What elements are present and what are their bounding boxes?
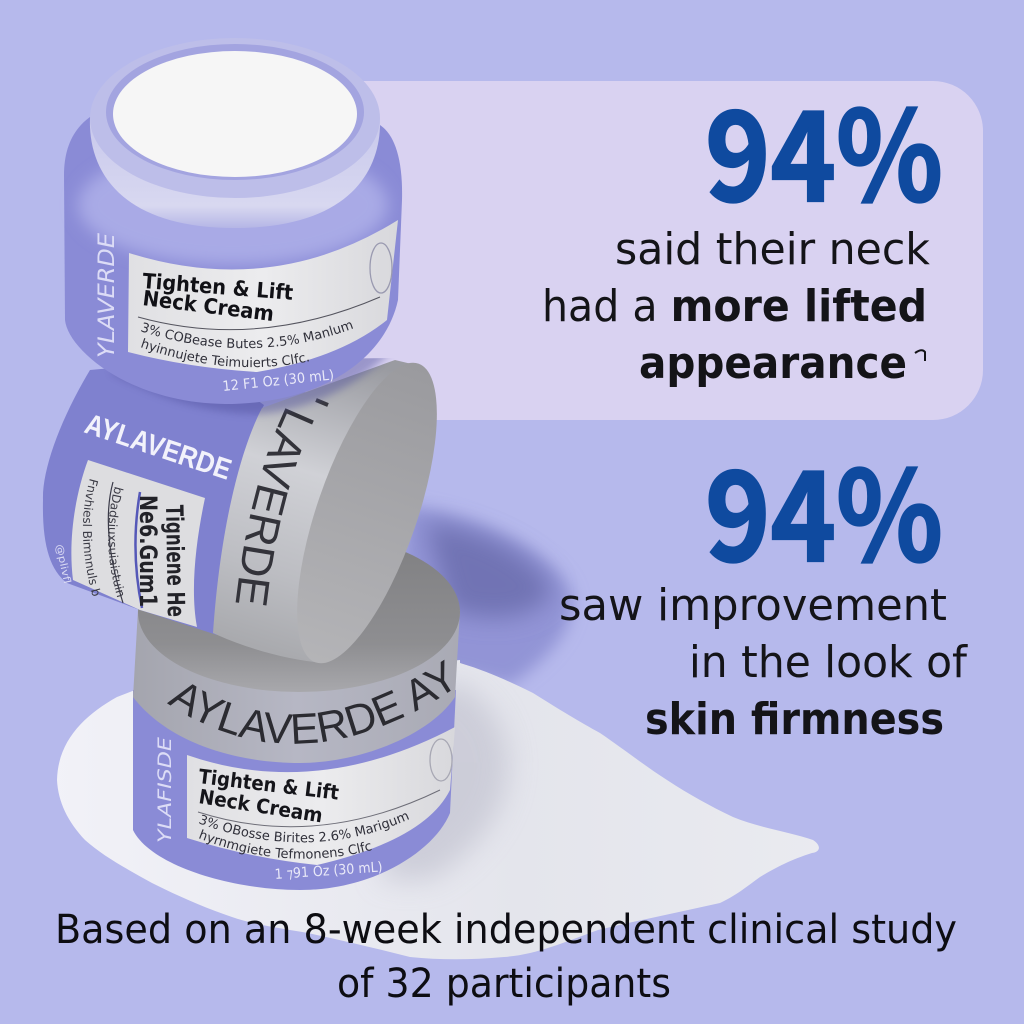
jar middle label: Tigniene He [160,505,190,617]
jar middle body [43,360,264,635]
jar middle label: Ne6.Gum1 [134,495,162,607]
jar bottom side brand: YLAFISDE [154,737,176,843]
jar bottom label: Neck Cream [197,784,324,827]
jar top side brand: YLAVERDE [95,233,120,358]
stat 2: description: skin firmness [645,694,944,745]
jar middle small text: @plivfl [53,543,72,585]
jar middle brand: AYLAVERDE [81,408,235,487]
jar middle lid face [268,347,466,679]
jar middle silver lid band [213,360,420,663]
jar top label: hyinnujete Teimuierts Clfc. [141,338,309,368]
jar top inner ring [106,44,364,180]
jar: top [64,44,402,404]
jar top label: Neck Cream [141,286,275,326]
stat 1: description: had a more lifted [542,281,927,332]
jar bottom volume text: 1 ⁊91 Oz (30 mL) [274,859,383,883]
stat 2: number: 94% [705,417,943,597]
stat 1: small footnote mark [915,350,925,361]
jar bottom brand: AYLAVERDE AY [167,660,451,744]
jar top volume text: 12 F1 Oz (30 mL) [222,367,335,395]
jar middle lid brand: LAVERDE [236,408,314,606]
stat 1: number: 94% [705,57,943,237]
cream smear [57,660,819,960]
stat 1: description [542,224,930,389]
jar bottom label: Tighten & Lift [197,764,341,805]
jar top label: Tighten & Lift [142,269,294,305]
jar bottom label [187,728,455,865]
jar: middle tilted [42,51,437,664]
jar top glass rim [90,38,380,198]
jar top body [64,117,402,404]
jar bottom label: hyrnmgiete Tefmonens Clfc. [199,829,372,859]
footnote: study details: Based on an 8-week independent clinical study [55,907,957,953]
cast shadow behind jars [400,505,573,685]
footnote: study details: of 32 participants [337,961,671,1007]
jar bottom label: 3% OBosse Birites 2.6% Marigum [199,813,409,842]
jar bottom lid band [133,610,460,763]
jar top glass neck [90,118,380,228]
panel: first stat background [300,81,983,420]
jar middle label [71,460,205,627]
jar bottom body [133,690,456,890]
jar: bottom [133,552,460,890]
jar top label [128,220,398,372]
stat 2: description: in the look of [689,637,968,688]
stat 1: description: said their neck [615,224,930,275]
stat 2: description: saw improvement [559,580,947,631]
footnote: study details [55,907,957,1007]
jar top frosted shoulder [78,145,388,265]
jar top cream [113,51,357,177]
jar bottom lid top [138,532,460,692]
jar top label: 3% COBease Butes 2.5% Manlum [141,322,353,348]
stat 1: description: appearance [639,338,907,389]
stat 2: description [559,580,968,745]
contact shadow under top jar [110,350,392,414]
